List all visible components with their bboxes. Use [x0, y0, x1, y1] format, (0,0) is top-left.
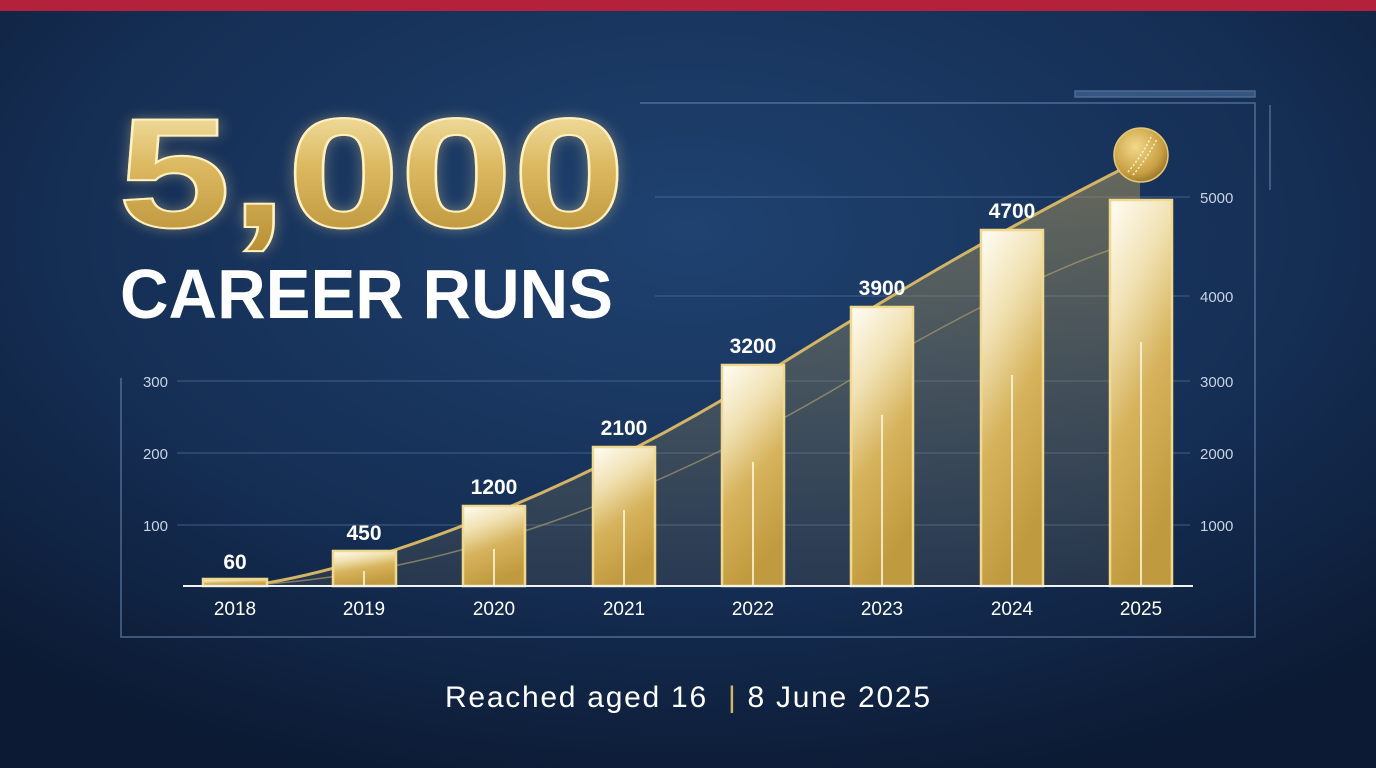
right axis labels: 2000 [1200, 446, 1233, 463]
year labels: 2022 [732, 599, 774, 620]
right axis labels: 5000 [1200, 190, 1233, 207]
trend area [267, 160, 1140, 586]
value labels [223, 200, 1035, 574]
title: 5,000: 5,000 [118, 87, 626, 261]
right axis labels [1200, 190, 1233, 535]
left axis labels: 300 [143, 374, 168, 391]
year labels: 2023 [861, 599, 903, 620]
bars [203, 200, 1172, 586]
subtitle: CAREER RUNS [120, 255, 613, 333]
value labels: 1200 [471, 476, 517, 499]
value labels: 3900 [859, 277, 905, 300]
right axis labels: 1000 [1200, 518, 1233, 535]
right axis labels: 3000 [1200, 374, 1233, 391]
value labels: 60 [223, 551, 247, 574]
left axis labels: 100 [143, 518, 168, 535]
value labels: 3200 [730, 335, 776, 358]
year labels: 2021 [603, 599, 645, 620]
value labels: 2100 [601, 417, 647, 440]
year labels: 2024 [991, 599, 1034, 620]
year labels: 2025 [1120, 599, 1162, 620]
year labels [214, 599, 1162, 620]
trend line [267, 160, 1140, 583]
left axis labels: 200 [143, 446, 168, 463]
right axis labels: 4000 [1200, 289, 1233, 306]
footer text: Reached aged 16 | 8 June 2025 [445, 681, 930, 714]
year labels: 2018 [214, 599, 256, 620]
baseline [183, 585, 1193, 587]
value labels: 450 [346, 522, 382, 545]
year labels: 2019 [343, 599, 385, 620]
icon: cricket ball [1114, 128, 1168, 182]
year labels: 2020 [473, 599, 515, 620]
value labels: 4700 [989, 200, 1035, 223]
left axis labels [143, 374, 168, 535]
chart frame [121, 91, 1270, 637]
gridlines [177, 197, 1190, 525]
